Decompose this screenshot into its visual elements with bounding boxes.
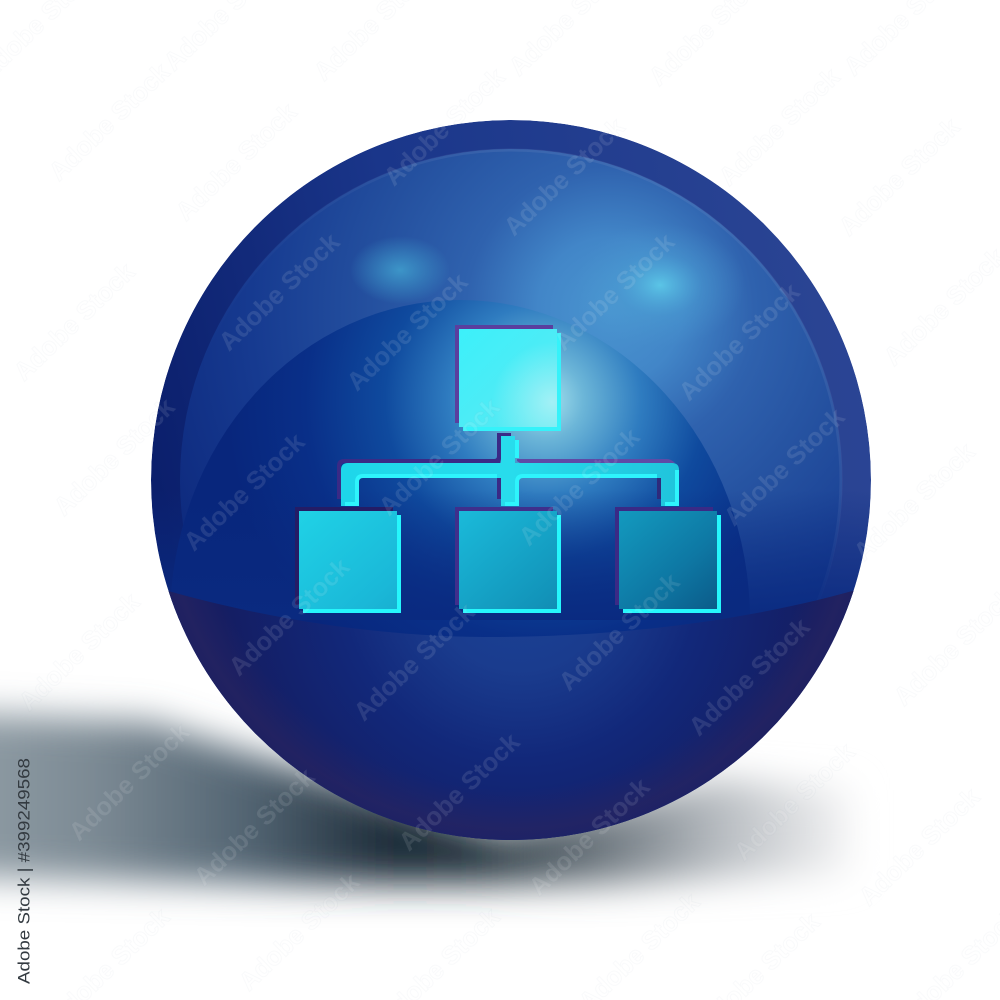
stock watermarks: Adobe Stock xyxy=(234,867,366,996)
stock watermarks: Adobe Stock xyxy=(171,97,303,226)
sphere rim lower xyxy=(168,591,854,840)
stock watermarks: Adobe Stock xyxy=(214,227,346,356)
blue sphere xyxy=(151,120,871,840)
bottom middle node xyxy=(455,507,561,613)
stock watermarks: Adobe Stock xyxy=(849,437,981,566)
stock watermarks: Adobe Stock xyxy=(554,567,686,696)
stock watermarks: Adobe Stock xyxy=(499,112,631,241)
stock watermarks: Adobe Stock xyxy=(14,587,146,716)
stock watermarks: Adobe Stock xyxy=(834,112,966,241)
stock watermarks: Adobe Stock xyxy=(49,392,181,521)
connector lines xyxy=(337,433,679,506)
stock watermarks: Adobe Stock xyxy=(379,62,511,191)
stock watermarks: Adobe Stock xyxy=(394,727,526,856)
glass top edge xyxy=(330,148,842,558)
stock watermarks: Adobe Stock xyxy=(514,422,646,551)
stock watermarks: Adobe Stock xyxy=(524,772,656,901)
stock watermarks: Adobe Stock xyxy=(684,612,816,741)
top node xyxy=(455,325,561,431)
stock watermarks: Adobe Stock xyxy=(342,267,474,396)
stock watermarks: Adobe Stock xyxy=(674,277,806,406)
stock watermarks: Adobe Stock xyxy=(44,57,176,186)
bottom left node xyxy=(295,507,401,613)
inner dome xyxy=(170,300,748,840)
stock watermarks: Adobe Stock xyxy=(64,717,196,846)
highlight right xyxy=(620,244,725,318)
stock watermarks: Adobe Stock xyxy=(224,552,356,681)
network hierarchy icon xyxy=(295,325,721,613)
stock watermarks: Adobe Stock xyxy=(9,257,141,386)
stock watermarks: Adobe Stock xyxy=(189,762,321,891)
stock watermarks: Adobe Stock xyxy=(714,62,846,191)
stock watermarks: Adobe Stock xyxy=(349,597,481,726)
stock watermarks: Adobe Stock xyxy=(719,402,851,531)
ground shadow xyxy=(0,712,850,884)
glass inner body xyxy=(180,149,842,552)
stock watermarks: Adobe Stock xyxy=(179,427,311,556)
bottom right node xyxy=(615,507,721,613)
dark band above lower reflection xyxy=(152,501,870,620)
stock watermarks: Adobe Stock xyxy=(549,227,681,356)
stock watermarks: Adobe Stock xyxy=(374,392,506,521)
highlight left xyxy=(356,240,443,300)
sphere base rim xyxy=(151,120,871,840)
stock watermarks: Adobe Stock xyxy=(854,782,986,911)
stock id label: Adobe Stock | #399249568 xyxy=(14,758,34,984)
lower reflection band xyxy=(168,590,854,840)
stock watermarks: Adobe Stock xyxy=(729,737,861,866)
